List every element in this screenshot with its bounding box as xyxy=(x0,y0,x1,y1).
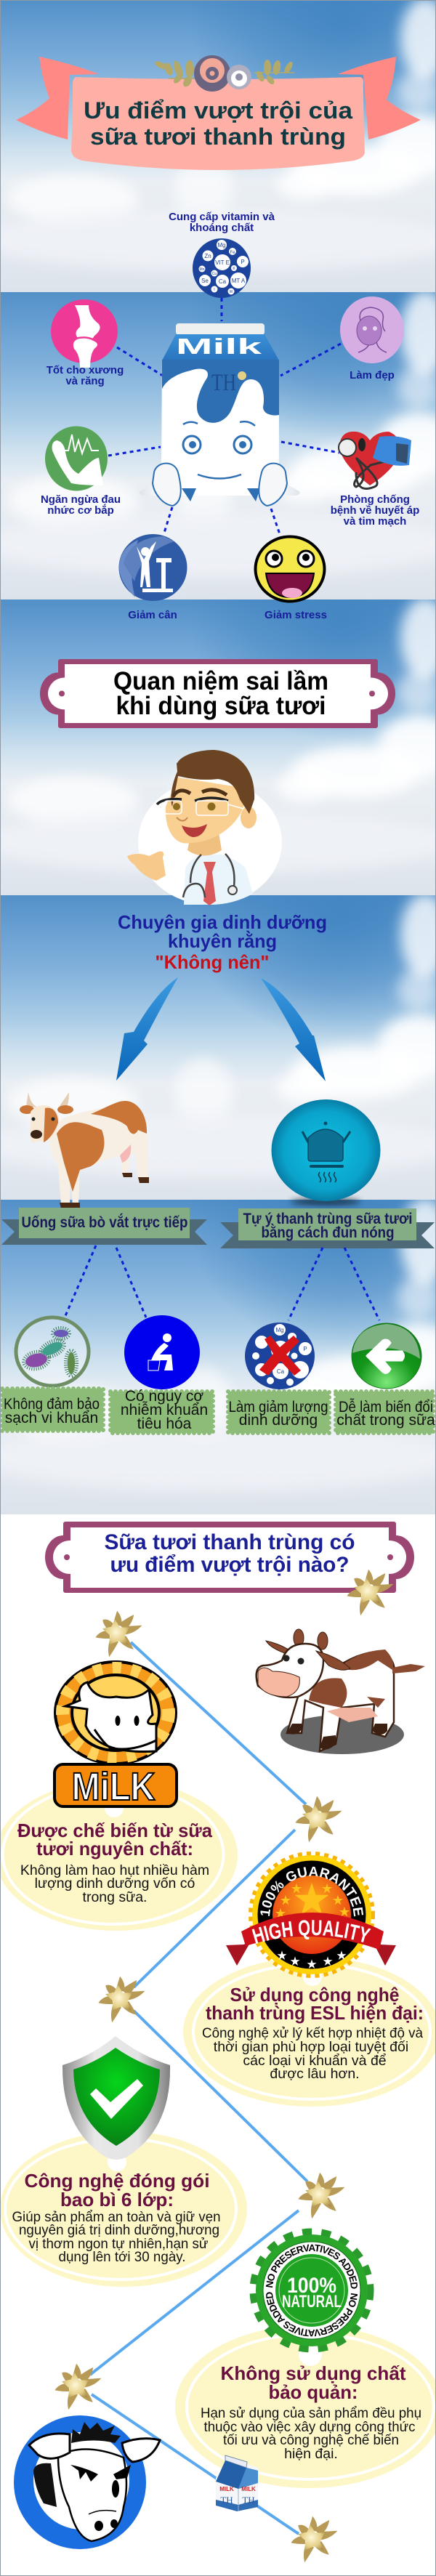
ribbon: drink raw milk xyxy=(1,1208,207,1245)
item 1 text xyxy=(17,1820,213,1905)
icon: green back arrow xyxy=(352,1323,421,1389)
ribbon: self pasteurize: Tự ý thanh trùng sữa tươi xyxy=(243,1211,413,1227)
icon: vitamins and minerals circle: K xyxy=(233,267,235,271)
badge: high quality xyxy=(226,1852,396,1978)
icon: toilet xyxy=(124,1315,200,1389)
icon: vitamins and minerals circle: I xyxy=(214,288,215,292)
label: blood pressure: bệnh về huyết áp xyxy=(331,504,419,517)
card: reduce nutrition: Làm giảm lượng xyxy=(228,1399,328,1416)
icon: weight scale xyxy=(119,534,187,601)
label: vitamin and minerals xyxy=(169,211,275,234)
card: alter substances: chất trong sữa xyxy=(336,1412,435,1429)
item 3 text: dụng lên tới 30 ngày. xyxy=(58,2249,186,2265)
heading: nutrition experts advise: Chuyên gia dinh dưỡng xyxy=(118,911,327,933)
card: infection: Có nguy cơ xyxy=(125,1388,203,1405)
badge: high quality: ★ xyxy=(275,1907,286,1920)
card: bacteria: sạch vi khuẩn xyxy=(5,1410,98,1426)
heading: nutrition experts advise xyxy=(118,911,327,973)
banner heading xyxy=(105,1530,355,1577)
ribbon: drink raw milk: Uống sữa bò vắt trực tiếp xyxy=(22,1214,187,1231)
banner heading: Sữa tươi thanh trùng có xyxy=(105,1530,355,1554)
milk carton character: Milk xyxy=(176,334,262,359)
title text: sữa tươi thanh trùng xyxy=(90,124,346,150)
badge: high quality: ★ xyxy=(323,1955,333,1967)
icon: face mask beauty xyxy=(340,296,404,363)
label: muscle pain xyxy=(41,493,121,517)
item 2 text xyxy=(202,1984,424,2082)
item 1 text: lượng dinh dưỡng vốn có xyxy=(35,1876,195,1891)
badge: high quality: ★ xyxy=(332,1894,344,1907)
illustration: brown cow xyxy=(20,1092,149,1208)
label: bones and teeth: và răng xyxy=(65,375,105,387)
dotted connectors around carton xyxy=(108,298,341,536)
logo: milk cow: MiLK xyxy=(71,1765,156,1809)
card: alter substances xyxy=(336,1392,435,1433)
item 1 text: Không làm hao hụt nhiều hàm xyxy=(20,1862,209,1878)
icon: vitamins and minerals circle xyxy=(193,238,251,298)
badge: 100% natural: NATURAL xyxy=(282,2292,342,2311)
badge: 100% natural: NO PRESERVATIVES ADDED xyxy=(266,2292,358,2337)
item 4 text: hiện đại. xyxy=(284,2446,338,2462)
icon: vitamins and minerals circle: VIT E xyxy=(215,259,230,266)
badge: 100% natural: NO PRESERVATIVES ADDED xyxy=(266,2244,358,2289)
item 3 text: Giúp sản phẩm an toàn và giữ vẹn xyxy=(12,2209,221,2225)
card: infection: tiêu hóa xyxy=(137,1416,192,1432)
badge: high quality: 100% GUARANTEE xyxy=(260,1866,363,1917)
title text: Ưu điểm vượt trội của xyxy=(84,97,352,124)
badge: high quality: ★ xyxy=(290,1955,300,1967)
tag bubble 4 xyxy=(175,2325,436,2488)
badge: high quality: ★ xyxy=(294,1880,330,1921)
arrow: right xyxy=(261,978,326,1081)
label: bones and teeth xyxy=(47,364,124,387)
icon: milk box: MILK xyxy=(241,2486,256,2492)
icon: knee bones xyxy=(51,299,118,368)
icon: vitamins and minerals circle: Cu xyxy=(212,272,217,276)
title ribbon xyxy=(16,55,421,170)
card: infection: nhiễm khuẩn xyxy=(121,1402,208,1418)
icon: vitamins and minerals circle: Se xyxy=(201,278,209,284)
badge: high quality: ★ xyxy=(291,1883,302,1895)
heading: nutrition experts advise: "Không nên" xyxy=(156,951,269,973)
label: blood pressure: và tim mạch xyxy=(344,515,406,528)
icon: vitamins and minerals circle: Ca xyxy=(219,278,227,285)
milk carton character: TH xyxy=(211,370,236,396)
card: bacteria xyxy=(2,1389,103,1431)
item 4 text xyxy=(201,2362,421,2462)
badge: high quality: ★ xyxy=(336,1950,347,1961)
icon: bacteria xyxy=(16,1317,89,1386)
card: bacteria: Không đảm bảo xyxy=(4,1396,100,1413)
item 2 text: được lâu hơn. xyxy=(270,2066,360,2082)
label: reduce stress: Giảm stress xyxy=(265,609,327,621)
label: bones and teeth: Tốt cho xương xyxy=(47,364,124,376)
label: lose weight: Giảm cân xyxy=(128,609,177,621)
item 3 text: bao bì 6 lớp: xyxy=(60,2189,174,2210)
tag bubble 1 xyxy=(0,1780,238,1931)
item 2 text: các loại vi khuẩn và để xyxy=(243,2053,387,2069)
icon: milk box: TH xyxy=(220,2495,233,2506)
item 2 text: thanh trùng ESL hiện đại: xyxy=(206,2002,424,2024)
label: vitamin and minerals: Cung cấp vitamin và xyxy=(169,211,275,223)
item 3 text: nguyên giá trị dinh dưỡng,hương xyxy=(19,2222,219,2238)
label: blood pressure: Phòng chống xyxy=(340,493,410,506)
card: reduce nutrition xyxy=(228,1392,329,1433)
card: reduce nutrition: dinh dưỡng xyxy=(239,1412,318,1429)
badge: high quality: ★ xyxy=(321,1883,333,1895)
item 3 text: vị thơm ngon tự nhiên,hạn sử xyxy=(29,2236,208,2252)
icon: vitamins and minerals circle: Mg xyxy=(217,242,226,249)
icon: blood pressure heart xyxy=(339,432,411,488)
illustration: cow head logo xyxy=(14,2415,160,2549)
card: infection xyxy=(110,1388,213,1433)
item 4 text: Không sử dụng chất xyxy=(221,2362,406,2384)
title text xyxy=(84,97,352,150)
tag bubble 3 xyxy=(0,2131,247,2287)
badge: high quality: ★ xyxy=(307,1958,317,1970)
icon: milk box xyxy=(216,2455,258,2511)
banner heading: ưu điểm vượt trội nào? xyxy=(110,1553,349,1577)
flower and leaf decoration xyxy=(153,55,294,92)
icon: smiley xyxy=(256,536,324,602)
icon: vitamins and minerals circle: Fe xyxy=(230,251,235,255)
badge: high quality: ★ xyxy=(339,1906,350,1918)
item 4 text: thuộc vào việc xây dựng công thức xyxy=(203,2419,416,2435)
icon: vitamins and minerals circle: Mn xyxy=(200,267,205,272)
item 4 text: tối ưu và công nghệ chế biến xyxy=(223,2432,399,2448)
doctor illustration xyxy=(127,750,282,905)
label: beauty: Làm đẹp xyxy=(350,369,395,381)
badge: 100% natural xyxy=(250,2228,374,2353)
icon: milk box: MILK xyxy=(219,2486,234,2492)
dotted connectors to consequences xyxy=(65,1245,379,1320)
item 3 text: Công nghệ đóng gói xyxy=(25,2170,209,2192)
label: muscle pain: nhức cơ bắp xyxy=(47,504,114,517)
icon: vitamins and minerals circle: W xyxy=(230,290,233,294)
item 2 text: Sử dụng công nghệ xyxy=(230,1984,400,2006)
banner heading: Quan niệm sai lầm xyxy=(113,667,328,695)
banner: misconceptions xyxy=(40,659,395,728)
icon: crossed out nutrients: P xyxy=(303,1346,307,1352)
label: vitamin and minerals: khoáng chất xyxy=(190,222,254,234)
icon: vitamins and minerals circle: Zn xyxy=(204,253,211,259)
timeline line xyxy=(90,1642,307,2534)
badge: high quality: ★ xyxy=(280,1894,291,1907)
milk carton character xyxy=(140,323,300,506)
icon: crossed out nutrients xyxy=(245,1323,315,1389)
item 3 text xyxy=(12,2170,221,2265)
badge: high quality: ★ xyxy=(277,1950,287,1961)
item 2 text: thời gian phù hợp loại tuyệt đối xyxy=(214,2039,408,2055)
illustration: cartoon cow xyxy=(257,1629,425,1754)
item 1 text: Được chế biến từ sữa xyxy=(17,1820,213,1841)
item 4 text: bảo quản: xyxy=(269,2381,358,2403)
heading: nutrition experts advise: khuyên rằng xyxy=(168,930,277,952)
icon: milk box: TH xyxy=(242,2495,255,2506)
ribbon: self pasteurize xyxy=(220,1208,435,1248)
icon: crossed out nutrients: Ca xyxy=(277,1368,285,1375)
item 1 text: tươi nguyên chất: xyxy=(36,1838,193,1860)
star markers xyxy=(54,1570,395,2564)
badge: high quality: HIGH QUALITY xyxy=(251,1920,371,1945)
icon: vitamins and minerals circle: P xyxy=(241,259,245,265)
icon: crossed out nutrients: Mg xyxy=(275,1327,284,1333)
item 1 text: trong sữa. xyxy=(83,1889,147,1905)
label: muscle pain: Ngăn ngừa đau xyxy=(41,493,121,506)
arrow: left xyxy=(116,977,178,1081)
ribbon: self pasteurize: bằng cách đun nóng xyxy=(262,1224,394,1241)
icon: vitamins and minerals circle: MT A xyxy=(232,278,246,284)
badge: 100% natural: 100% xyxy=(287,2274,336,2298)
item 4 text: Hạn sử dụng của sản phẩm đều phụ xyxy=(201,2405,421,2421)
item 2 text: Công nghệ xử lý kết hợp nhiệt độ và xyxy=(202,2025,423,2041)
banner heading xyxy=(113,667,328,720)
logo: milk cow xyxy=(54,1662,177,1809)
banner heading: khi dùng sữa tươi xyxy=(116,692,326,720)
tag bubble 2 xyxy=(183,1957,436,2107)
icon: green shield xyxy=(62,2036,170,2160)
label: blood pressure xyxy=(331,493,419,528)
icon: muscle xyxy=(45,426,108,491)
icon: heated pot xyxy=(272,1099,381,1206)
banner: advantages xyxy=(45,1522,414,1593)
